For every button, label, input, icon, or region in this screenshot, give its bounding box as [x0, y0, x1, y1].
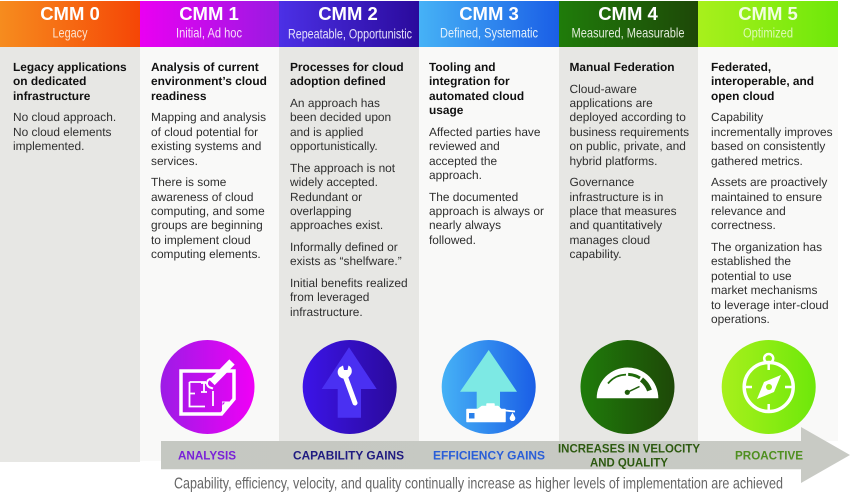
text: CMM 0 column: Legacy applications: [13, 60, 127, 74]
text: CMM 2 column: from leveraged: [290, 290, 369, 304]
header bands and titles: CMM 5: [738, 3, 798, 24]
text: CMM 5 column: incrementally improves: [711, 125, 833, 139]
text: CMM 3 column: followed.: [429, 233, 476, 247]
text: CMM 3 column: Affected parties have: [429, 125, 540, 139]
text: CMM 1 column: existing systems and: [151, 139, 261, 153]
panel: CMM 3 background: [419, 47, 559, 441]
text: CMM 2 column: Redundant or: [290, 190, 362, 204]
text: CMM 1 column: groups are beginning: [151, 218, 263, 232]
text: CMM 3 column: Tooling and: [429, 60, 495, 74]
text: CMM 5 column: based on consistently: [711, 139, 825, 153]
panel: CMM 0 background: [0, 47, 140, 462]
text: CMM 2 column: widely accepted.: [290, 175, 378, 189]
text: CMM 3 column: nearly always: [429, 218, 501, 232]
text: CMM 5 column: The organization has: [711, 240, 822, 254]
text: CMM 5 column: relevance and: [711, 204, 786, 218]
text: CMM 1 column: environment’s cloud: [151, 74, 267, 88]
text: CMM 3 column: The documented: [429, 190, 518, 204]
panel: CMM 4 background: [559, 47, 698, 441]
text: CMM 5 column: correctness.: [711, 218, 776, 232]
text: CMM 2 column: Initial benefits realized: [290, 276, 408, 290]
text: CMM 4 column: Governance: [570, 175, 634, 189]
panel: CMM 1 background: [140, 47, 279, 461]
header bands and titles: CMM 3: [459, 3, 519, 24]
text: CMM 4 column: capability.: [570, 247, 622, 261]
text: CMM 1 column: readiness: [151, 89, 207, 103]
text: CMM 3 column: reviewed and: [429, 139, 500, 153]
text: CMM 4 column: and quantitatively: [570, 218, 662, 232]
text: CMM 0 column: implemented.: [13, 139, 84, 153]
text: CMM 1 column: of cloud potential for: [151, 125, 258, 139]
icon: efficiency engine arrow: [442, 340, 536, 434]
icon: analysis blueprint: [160, 340, 254, 434]
label: capability gains: CAPABILITY GAINS: [293, 448, 404, 462]
text: CMM 3 column: approach is always or: [429, 204, 544, 218]
text: CMM 2 column: Processes for cloud: [290, 60, 404, 74]
text: CMM 5 column: potential to use: [711, 269, 792, 283]
text: CMM 2 column: approaches exist.: [290, 218, 383, 232]
text: CMM 4 column: business requirements: [570, 125, 689, 139]
header bands and titles: Defined, Systematic: [440, 24, 538, 40]
label: efficiency gains: EFFICIENCY GAINS: [433, 448, 545, 462]
text: CMM 5 column: Federated,: [711, 60, 771, 74]
text: CMM 4 column: Manual Federation: [570, 60, 675, 74]
text: CMM 4 column: [570, 60, 689, 261]
icon: proactive compass: [722, 340, 816, 434]
text: CMM 4 column: infrastructure is in: [570, 190, 663, 204]
header bands and titles: CMM 4: [598, 3, 659, 24]
text: CMM 1 column: to implement cloud: [151, 233, 251, 247]
header bands and titles: Optimized: [743, 24, 793, 40]
text: CMM 1 column: computing, and some: [151, 204, 265, 218]
text: CMM 0 column: [13, 60, 127, 153]
text: CMM 0 column: on dedicated: [13, 74, 86, 88]
text: CMM 5 column: Capability: [711, 110, 763, 124]
text: CMM 0 column: No cloud elements: [13, 125, 111, 139]
text: CMM 3 column: integration for: [429, 74, 510, 88]
text: CMM 2 column: and is applied: [290, 125, 363, 139]
text: CMM 1 column: computing elements.: [151, 247, 261, 261]
text: CMM 2 column: adoption defined: [290, 74, 386, 88]
header bands and titles: CMM 2: [318, 3, 378, 24]
arrow: progression: [161, 427, 850, 483]
icon: capability wrench arrow: [303, 340, 397, 434]
header bands and titles: CMM 1: [179, 3, 239, 24]
icon: velocity gauge: [580, 340, 674, 434]
text: CMM 0 column: No cloud approach.: [13, 110, 116, 124]
text: CMM 2 column: infrastructure.: [290, 305, 363, 319]
text: CMM 1 column: awareness of cloud: [151, 190, 253, 204]
text: CMM 4 column: Cloud-aware: [570, 82, 637, 96]
text: CMM 2 column: [290, 60, 408, 319]
text: CMM 1 column: Mapping and analysis: [151, 110, 266, 124]
text: CMM 3 column: usage: [429, 103, 463, 117]
text: CMM 2 column: opportunistically.: [290, 139, 378, 153]
label: increases in velocity and quality: INCREASES IN VELOCITY: [558, 442, 700, 456]
text: CMM 4 column: manages cloud: [570, 233, 650, 247]
label: analysis: ANALYSIS: [178, 448, 236, 462]
text: CMM 1 column: There is some: [151, 175, 226, 189]
text: CMM 5 column: operations.: [711, 312, 770, 326]
header bands and titles: Initial, Ad hoc: [176, 24, 242, 40]
text: CMM 5 column: to leverage inter-cloud: [711, 298, 829, 312]
text: CMM 1 column: services.: [151, 154, 198, 168]
text: CMM 3 column: approach.: [429, 168, 482, 182]
text: CMM 4 column: place that measures: [570, 204, 677, 218]
text: CMM 3 column: [429, 60, 544, 247]
text: CMM 1 column: [151, 60, 267, 261]
label: proactive: PROACTIVE: [735, 448, 803, 462]
text: CMM 4 column: applications are: [570, 96, 653, 110]
text: CMM 3 column: automated cloud: [429, 89, 524, 103]
text: CMM 4 column: on public, private, and: [570, 139, 686, 153]
text: CMM 5 column: market mechanisms: [711, 283, 817, 297]
header bands and titles: Repeatable, Opportunistic: [288, 26, 412, 42]
text: CMM 5 column: gathered metrics.: [711, 154, 803, 168]
panel: CMM 2 background: [279, 47, 419, 441]
label: increases in velocity and quality: AND QUALITY: [590, 456, 668, 470]
text: CMM 2 column: An approach has: [290, 96, 380, 110]
text: CMM 5 column: maintained to ensure: [711, 190, 822, 204]
text: CMM 5 column: open cloud: [711, 89, 774, 103]
header bands and titles: CMM 0: [40, 3, 100, 24]
text: CMM 2 column: been decided upon: [290, 110, 391, 124]
text: CMM 4 column: deployed according to: [570, 110, 686, 124]
text: CMM 4 column: hybrid platforms.: [570, 154, 657, 168]
header bands and titles: Measured, Measurable: [572, 24, 685, 40]
text: CMM 5 column: interoperable, and: [711, 74, 814, 88]
text: CMM 1 column: Analysis of current: [151, 60, 259, 74]
text: CMM 2 column: overlapping: [290, 204, 351, 218]
text: CMM 5 column: established the: [711, 254, 791, 268]
text: CMM 3 column: accepted the: [429, 154, 497, 168]
text: CMM 0 column: infrastructure: [13, 89, 90, 103]
text: CMM 2 column: The approach is not: [290, 161, 395, 175]
header bands and titles: Legacy: [52, 24, 88, 40]
text: CMM 2 column: exists as “shelfware.”: [290, 254, 402, 268]
text: CMM 5 column: Assets are proactively: [711, 175, 827, 189]
text: CMM 5 column: [711, 60, 833, 326]
panel: CMM 5 background: [698, 47, 838, 441]
text: CMM 2 column: Informally defined or: [290, 240, 398, 254]
